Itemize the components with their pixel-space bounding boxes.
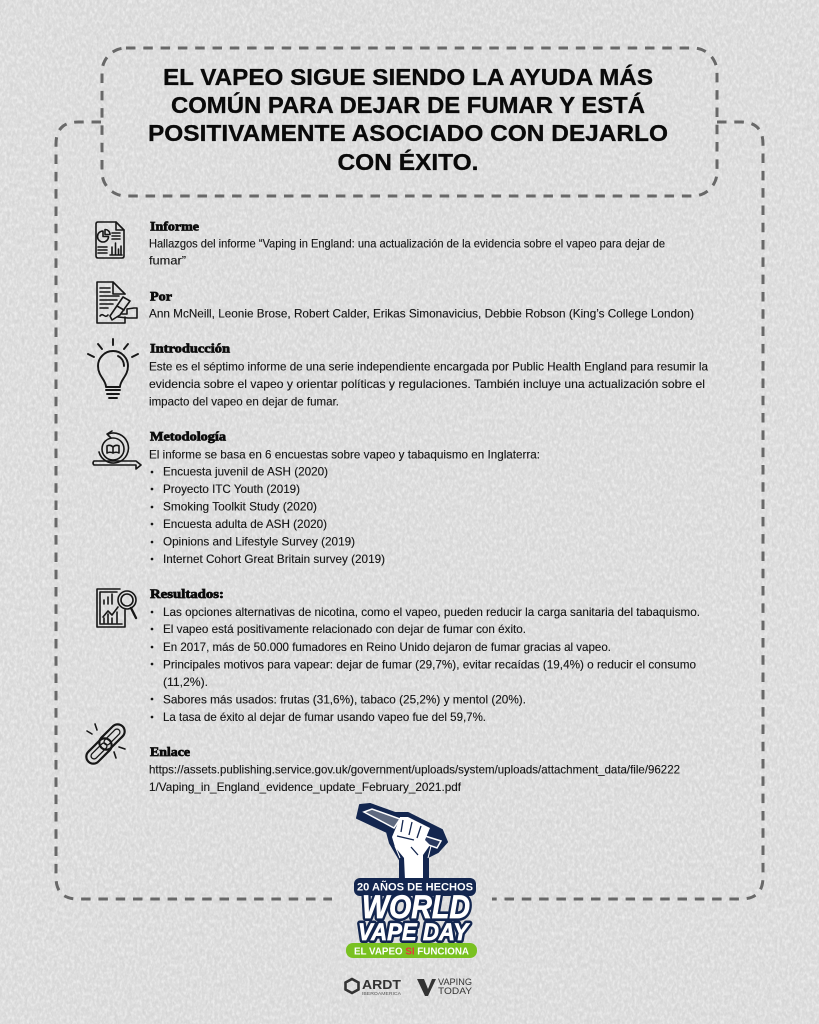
- text: link URL: [149, 764, 680, 794]
- title: EL VAPEO SIGUE SIENDO LA AYUDA MÁS: [163, 63, 653, 90]
- icon: results chart and magnifier: [97, 589, 136, 627]
- text: Introducción: evidencia sobre el vapeo y orientar políticas y regulaciones. También incluye una actualización sobre el: [149, 378, 705, 391]
- text: Resultados: [151, 606, 700, 724]
- wordmark: World Vape Day: VAPE DAY: [358, 919, 470, 946]
- text: Metodología: Encuesta juvenil de ASH (2020): [163, 466, 328, 478]
- heading: Informe: Informe: [150, 220, 199, 234]
- text: Informe: Hallazgos del informe “Vaping in England: una actualización de la evidencia sobre el vapeo para dejar de: [149, 238, 665, 250]
- logo: Vaping Today: VAPING: [438, 977, 472, 988]
- logo: World Vape Day: [346, 804, 477, 958]
- section: Por: [97, 282, 694, 323]
- heading: Por: Por: [150, 290, 173, 304]
- fist with vape device: [357, 804, 447, 882]
- wordmark: World Vape Day: WORLD: [362, 889, 470, 925]
- text: Metodología: [149, 448, 540, 566]
- title: POSITIVAMENTE ASOCIADO CON DEJARLO: [148, 120, 668, 146]
- text: Metodología: Encuesta adulta de ASH (2020): [163, 518, 327, 531]
- wordmark: World Vape Day: VAPE DAY: [358, 919, 470, 946]
- green pill: el vapeo sí funciona: EL VAPEO SI FUNCIONA: [354, 946, 469, 958]
- text: Metodología: Proyecto ITC Youth (2019): [163, 483, 300, 496]
- banner: 20 años de hechos: 20 AÑOS DE HECHOS: [357, 880, 473, 894]
- text: link URL: 1/Vaping_in_England_evidence_update_February_2021.pdf: [149, 781, 462, 794]
- heading: Enlace: Enlace: [150, 745, 190, 759]
- logo: ARDT Iberoamérica: IBEROAMERICA: [362, 991, 402, 996]
- banner: 20 años de hechos: [354, 878, 476, 896]
- text: Resultados: El vapeo está positivamente relacionado con dejar de fumar con éxito.: [163, 623, 526, 636]
- heading: Metodología: Metodología: [150, 430, 227, 444]
- text: Metodología: Opinions and Lifestyle Survey (2019): [163, 536, 355, 548]
- text: Resultados: Las opciones alternativas de nicotina, como el vapeo, pueden reducir la carga sanitaria del tabaquismo.: [163, 606, 700, 619]
- section: Introducción: [88, 339, 708, 408]
- icon: chain link: [83, 721, 128, 767]
- text: Introducción: [149, 360, 708, 408]
- section: Metodología: [93, 430, 540, 566]
- heading: Introducción: Introducción: [150, 342, 230, 356]
- heading: Resultados: Resultados:: [150, 587, 224, 601]
- logo: ARDT Iberoamérica: ARDT: [362, 977, 401, 992]
- text: Metodología: Smoking Toolkit Study (2020): [163, 500, 317, 514]
- title: [148, 63, 668, 175]
- title dashed box: [102, 48, 717, 196]
- text: Introducción: Este es el séptimo informe de una serie independiente encargada por Public Health England para resumir la: [149, 360, 708, 374]
- icon: report document: [96, 222, 124, 258]
- text: Resultados: (11,2%).: [163, 676, 208, 689]
- title: COMÚN PARA DEJAR DE FUMAR Y ESTÁ: [171, 91, 645, 118]
- title: CON ÉXITO.: [338, 148, 478, 175]
- logo: ARDT Iberoamérica: [346, 977, 402, 996]
- logo: Vaping Today: TODAY: [438, 986, 473, 997]
- text: Informe: [149, 238, 665, 268]
- section: Enlace: [83, 721, 680, 794]
- icon: methodology cycle: [93, 431, 141, 469]
- text: Resultados: Principales motivos para vapear: dejar de fumar (29,7%), evitar recaídas (19,4%) o reducir el consumo: [163, 658, 696, 672]
- icon: light bulb: [88, 339, 138, 398]
- logo: Vaping Today: [417, 977, 473, 997]
- text: Metodología: El informe se basa en 6 encuestas sobre vapeo y tabaquismo en Inglaterra:: [149, 448, 540, 462]
- text: Resultados: Sabores más usados: frutas (31,6%), tabaco (25,2%) y mentol (20%).: [163, 694, 526, 706]
- outer dashed frame: [56, 122, 763, 899]
- text: Resultados: La tasa de éxito al dejar de fumar usando vapeo fue del 59,7%.: [163, 711, 486, 724]
- icon: signing document: [97, 282, 137, 323]
- text: Resultados: En 2017, más de 50.000 fumadores en Reino Unido dejaron de fumar gracias al vapeo.: [163, 641, 611, 654]
- text: Metodología: Internet Cohort Great Britain survey (2019): [163, 553, 385, 566]
- section: Resultados: [97, 587, 700, 724]
- text: Introducción: impacto del vapeo en dejar de fumar.: [149, 396, 339, 408]
- text: Por: Ann McNeill, Leonie Brose, Robert Calder, Erikas Simonavicius, Debbie Robson (King’s College London): [149, 308, 694, 320]
- text: Informe: fumar”: [149, 254, 186, 268]
- wordmark: World Vape Day: WORLD: [362, 889, 470, 925]
- wordmark: World Vape Day: [358, 889, 470, 946]
- section: Informe: [96, 220, 665, 268]
- text: link URL: https://assets.publishing.service.gov.uk/government/uploads/system/uploads/attachment_data/file/96222: [149, 764, 680, 776]
